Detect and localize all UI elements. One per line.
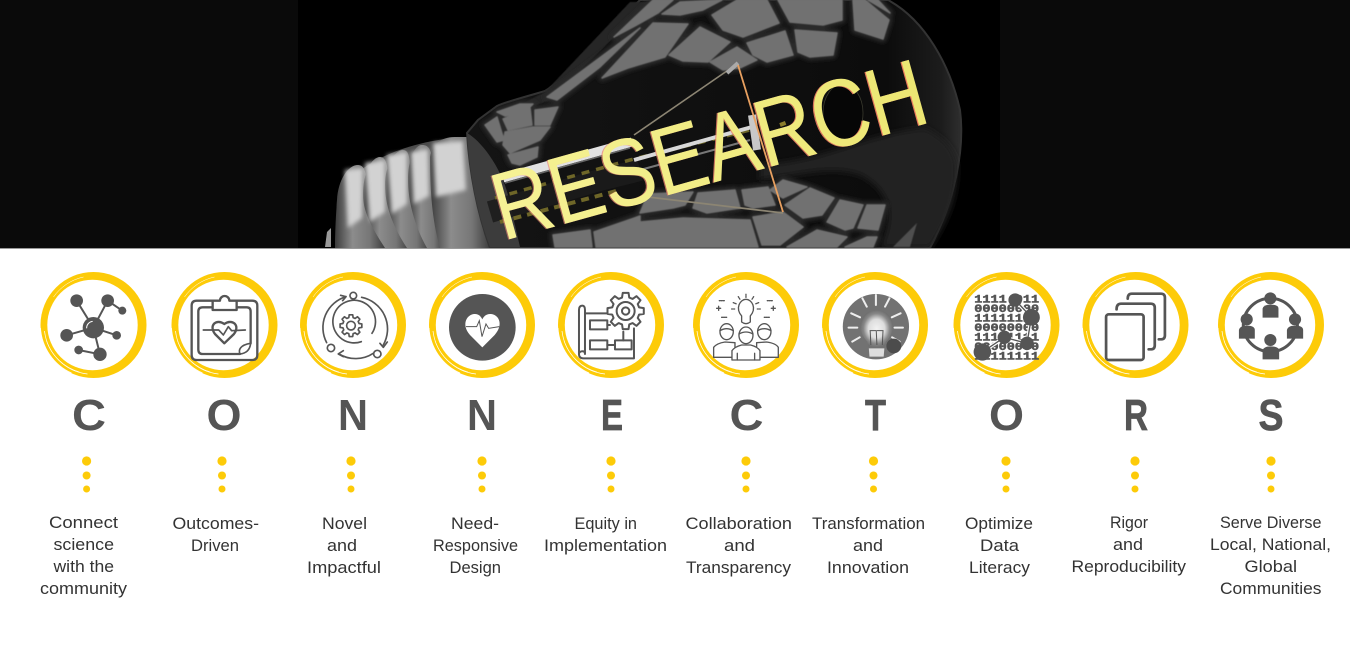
icon: binary data graph: 11111111 — [974, 351, 1039, 363]
ring 2 — [172, 272, 278, 378]
description — [544, 514, 667, 555]
description: Serve Diverse — [1220, 513, 1322, 532]
glass collar — [467, 133, 520, 247]
icon: binary data graph: 1111 011 — [974, 295, 1039, 307]
column 5: Equity in Implementation — [544, 272, 667, 555]
ring 1 — [40, 272, 146, 378]
letter N: N — [338, 391, 368, 440]
ring 5 — [558, 272, 664, 378]
description: Need- — [451, 514, 499, 533]
description: and — [853, 536, 883, 555]
letter T: T — [865, 391, 886, 440]
description: community — [40, 579, 128, 598]
description — [433, 514, 518, 577]
description — [1210, 513, 1331, 598]
icon: binary data graph — [974, 293, 1040, 363]
ring 4 — [429, 272, 535, 378]
description — [307, 514, 381, 577]
dots — [346, 456, 356, 492]
letter C: C — [730, 391, 764, 440]
description: Global — [1244, 557, 1297, 576]
dots — [217, 456, 227, 492]
description — [812, 514, 925, 577]
ring 9 — [1082, 272, 1188, 378]
description: Transformation — [812, 514, 925, 533]
description: science — [54, 535, 114, 554]
description: Literacy — [969, 558, 1031, 577]
description — [172, 514, 259, 555]
description: and — [724, 536, 755, 555]
description — [40, 513, 128, 598]
letter E: E — [601, 391, 623, 440]
filament stem — [490, 63, 863, 222]
description: Transparency — [686, 558, 791, 577]
description: Optimize — [965, 514, 1033, 533]
column 1: Connect — [40, 272, 146, 598]
description: Driven — [191, 536, 239, 555]
description — [686, 514, 792, 577]
glass reflections web — [485, 0, 890, 247]
description: with the — [52, 557, 114, 576]
dots — [1266, 456, 1276, 492]
glass upper dark band — [530, 2, 646, 104]
column 10: Serve Diverse Communities — [1210, 272, 1331, 598]
dots — [1130, 456, 1140, 492]
title: RESEARCH: RESEARCH — [479, 39, 937, 262]
icon: cycle gear — [323, 292, 388, 359]
icon: heart pulse disc — [449, 294, 516, 361]
dots — [1001, 456, 1011, 492]
icon: stacked documents — [1106, 294, 1165, 360]
dots — [869, 456, 878, 492]
description: Outcomes- — [172, 514, 259, 533]
letter O: O — [989, 391, 1024, 440]
icon: network — [60, 294, 126, 361]
ring 7 — [822, 272, 928, 378]
glass reflections — [485, 0, 890, 247]
dots — [477, 456, 487, 492]
icon: binary data graph: 00000000 — [974, 304, 1039, 316]
icon: binary data graph: 00000000 — [974, 323, 1039, 335]
description: and — [327, 536, 357, 555]
description: Collaboration — [686, 514, 792, 533]
description: Impactful — [307, 558, 381, 577]
column 9: Rigor and Reproducibility — [1072, 272, 1188, 576]
icon: binary data graph: 11111111 — [974, 314, 1039, 326]
letter O: O — [206, 391, 242, 440]
glass lower right shade — [760, 128, 957, 248]
ring 8 — [954, 272, 1060, 378]
dots — [82, 456, 91, 492]
title: RESEARCH: RESEARCH — [480, 39, 938, 261]
icon: people circle — [1239, 292, 1303, 359]
description — [1072, 513, 1187, 576]
dots — [741, 456, 751, 492]
letter R: R — [1124, 391, 1148, 440]
description: Rigor — [1110, 513, 1148, 532]
description — [965, 514, 1033, 577]
ring 3 — [300, 272, 406, 378]
description: Innovation — [827, 558, 909, 577]
description: and — [1113, 535, 1143, 554]
icon: binary data graph: 00000000 — [974, 342, 1039, 354]
letter C: C — [72, 391, 106, 440]
description: Equity in — [574, 514, 637, 533]
description: Communities — [1220, 579, 1322, 598]
description: Reproducibility — [1072, 557, 1187, 576]
letter N: N — [467, 391, 497, 440]
dots — [606, 456, 616, 492]
description: Implementation — [544, 536, 667, 555]
description: Novel — [322, 514, 367, 533]
icon: blueprint gear — [579, 293, 644, 358]
bulb glass — [467, 0, 961, 248]
banner background — [0, 0, 1350, 249]
icon: clipboard heart — [192, 296, 257, 360]
column 7: Transformation and Innovation — [812, 272, 928, 577]
column 3: Novel and Impactful — [300, 272, 406, 577]
description: Local, National, — [1210, 535, 1331, 554]
column 8: Optimize Data Literacy — [954, 272, 1060, 577]
column 4: Need-Responsive Design — [429, 272, 535, 577]
description: Connect — [49, 513, 118, 532]
icon: team idea — [714, 294, 778, 360]
letter S: S — [1258, 391, 1284, 440]
description: Data — [980, 536, 1020, 555]
ring 10 — [1218, 272, 1324, 378]
light bulb photo — [325, 0, 961, 248]
icon: sketched bulb — [843, 294, 909, 359]
ring 6 — [693, 272, 799, 378]
description: Responsive — [433, 536, 518, 555]
icon: binary data graph: 11111111 — [974, 333, 1039, 345]
bulb screw base — [325, 137, 490, 248]
column 2: Outcomes-Driven — [172, 272, 278, 555]
column 6: Collaboration and Transparency — [686, 272, 799, 577]
description: Design — [450, 558, 501, 577]
